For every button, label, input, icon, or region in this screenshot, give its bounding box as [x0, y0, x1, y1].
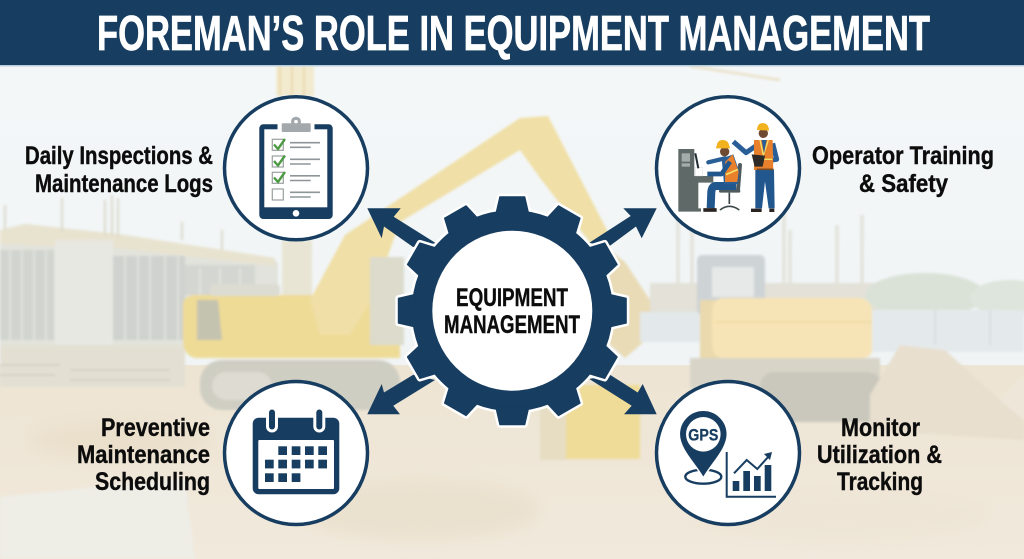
gear label: [444, 284, 580, 339]
yellow bucket blade: [566, 385, 640, 459]
label: operator training: & Safety: [859, 170, 948, 198]
crane masts: [276, 66, 314, 96]
panel: monitor utilization GPS icon: [656, 382, 800, 524]
label: preventive maintenance: [77, 414, 210, 496]
boom and arm: [310, 116, 612, 335]
label: daily inspections: Maintenance Logs: [35, 170, 213, 198]
gear label: MANAGEMENT: [444, 311, 580, 339]
label: daily inspections: [25, 142, 213, 198]
dirt mounds: [870, 345, 1024, 440]
label: operator training: Operator Training: [812, 142, 994, 170]
label: operator training: [812, 142, 994, 198]
seated torso: [722, 154, 739, 184]
panel: preventive maintenance calendar icon: [224, 382, 368, 524]
panel: daily inspections icon: [224, 97, 368, 240]
right excavator cab: [697, 255, 765, 315]
label: preventive maintenance: Preventive: [101, 414, 210, 442]
left building: [0, 224, 278, 348]
label: preventive maintenance: Scheduling: [95, 468, 210, 496]
right excavator undercarriage: [690, 358, 880, 388]
gear label: EQUIPMENT: [456, 284, 568, 312]
seated legs: [711, 186, 736, 208]
title banner: [0, 0, 1024, 66]
panel: operator training icon: [656, 97, 800, 240]
panel: monitor utilization GPS icon: GPS: [688, 426, 718, 445]
arrow: to daily inspections: [367, 208, 436, 247]
label: monitor utilization: Tracking: [837, 468, 923, 496]
background posts and buildings right: [678, 215, 862, 300]
left excavator tracks: [200, 360, 400, 410]
concrete slab: [0, 478, 195, 559]
standing worker: [755, 169, 775, 208]
arrow: to operator training: [589, 208, 657, 247]
label: monitor utilization: Monitor: [841, 414, 920, 442]
label: monitor utilization: [817, 414, 942, 496]
right excavator body: [700, 300, 730, 362]
central gear: [398, 197, 626, 425]
arrow: to monitor utilization: [589, 375, 657, 414]
label: daily inspections: Daily Inspections &: [25, 142, 213, 170]
label: preventive maintenance: Maintenance: [77, 441, 210, 469]
fence: [870, 310, 1024, 352]
trees: [865, 273, 985, 317]
seated chair: [738, 165, 740, 190]
label: monitor utilization: Utilization &: [817, 441, 942, 469]
left excavator body: [183, 295, 400, 358]
arrow: to preventive maintenance: [367, 375, 435, 414]
